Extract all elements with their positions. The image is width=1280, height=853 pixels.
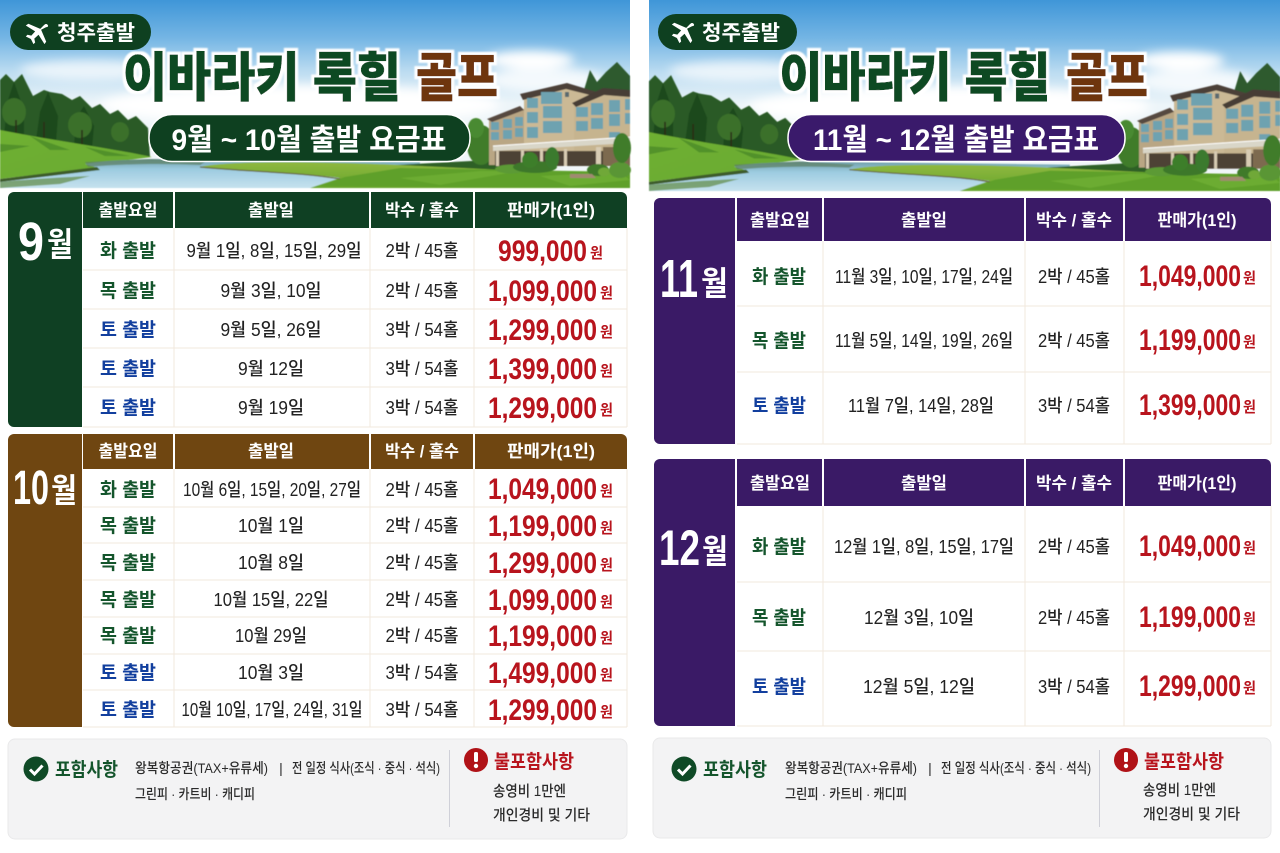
header row: 출발요일 (98, 201, 158, 220)
title left: 이바라키 록힐 (123, 49, 401, 108)
rows: 목 출발 (100, 625, 156, 647)
rows: 화 출발 (752, 536, 806, 558)
panel: inclusions right: 개인경비 및 기타 (1143, 806, 1240, 823)
rows: 12월 5일, 12일 (863, 677, 975, 697)
rows: 1,049,000 (1139, 530, 1241, 563)
rows: 1,049,000 (488, 473, 597, 506)
rows: 1,299,000 (488, 392, 597, 425)
rows: 화 출발 (100, 479, 156, 501)
header row: 판매가(1인) (1158, 211, 1236, 230)
rows: 1,199,000 (1139, 601, 1241, 634)
subtitle pill right: 11월 ~ 12월 출발 요금표 (813, 124, 1099, 157)
rows: 10월 10일, 17일, 24일, 31일 (182, 700, 362, 720)
header row: 판매가(1인) (507, 442, 595, 461)
panel: inclusions left: 전 일정 식사(조식 · 중식 · 석식) (292, 760, 440, 776)
rows: 9월 5일, 26일 (220, 320, 322, 340)
rows: 2박 / 45홀 (386, 516, 458, 536)
rows: 11월 3일, 10일, 17일, 24일 (835, 267, 1013, 287)
rows: 원 (600, 520, 613, 537)
title left: 골프 (416, 49, 498, 108)
panel: inclusions right: 전 일정 식사(조식 · 중식 · 석식) (941, 760, 1091, 776)
panel: inclusions left: 그린피 · 카트비 · 캐디피 (135, 786, 255, 802)
rows: 9월 3일, 10일 (220, 281, 322, 301)
rows: 원 (600, 594, 613, 611)
rows: 토 출발 (752, 395, 806, 417)
header row (83, 434, 627, 469)
panel: October table (8, 434, 627, 727)
panel: November table (654, 198, 1271, 444)
rows: 12월 1일, 8일, 15일, 17일 (834, 537, 1014, 557)
rows: 원 (600, 483, 613, 500)
panel: September table (8, 192, 627, 427)
rows: 토 출발 (100, 699, 156, 721)
rows: 원 (600, 667, 613, 684)
panel: inclusions left: 송영비 1만엔 (493, 783, 566, 800)
rows: 1,299,000 (488, 314, 597, 347)
panel: inclusions right: | (928, 760, 932, 776)
rows: 9월 1일, 8일, 15일, 29일 (186, 241, 362, 261)
rows: 목 출발 (100, 280, 156, 302)
rows: 2박 / 45홀 (1038, 608, 1110, 628)
banner: left scene (0, 0, 631, 188)
rows: 1,299,000 (488, 547, 597, 580)
rows: 3박 / 54홀 (386, 700, 458, 720)
header row: 박수 / 홀수 (385, 442, 459, 461)
month cell: 12월: 월 (702, 533, 728, 570)
rows: 2박 / 45홀 (386, 241, 458, 261)
rows: 11월 7일, 14일, 28일 (848, 396, 994, 416)
rows: 목 출발 (752, 607, 806, 629)
rows: 10월 3일 (238, 663, 304, 683)
rows: 원 (600, 557, 613, 574)
rows: 토 출발 (100, 319, 156, 341)
rows: 999,000 (498, 235, 587, 268)
rows: 원 (1243, 399, 1256, 416)
rows: 화 출발 (100, 240, 156, 262)
header row (83, 192, 627, 228)
rows: 원 (600, 324, 613, 341)
rows: 11월 5일, 14일, 19일, 26일 (835, 331, 1013, 351)
panel: inclusions left: 개인경비 및 기타 (493, 807, 590, 824)
rows: 3박 / 54홀 (386, 320, 458, 340)
header row: 판매가(1인) (1158, 474, 1236, 493)
rows: 원 (600, 402, 613, 419)
rows: 2박 / 45홀 (1038, 331, 1110, 351)
rows: 원 (1243, 680, 1256, 697)
month cell: 11월: 월 (701, 265, 728, 302)
rows: 목 출발 (100, 589, 156, 611)
icon: exclamation (464, 748, 488, 772)
panel: inclusions right: 포함사항 (703, 759, 767, 781)
rows: 1,199,000 (488, 510, 597, 543)
rows: 1,199,000 (488, 620, 597, 653)
rows: 3박 / 54홀 (1038, 677, 1110, 697)
badge: departure city right (658, 14, 797, 50)
banner: right scene (649, 0, 1280, 191)
rows: 10월 29일 (235, 626, 307, 646)
rows (737, 506, 1271, 726)
rows: 1,299,000 (488, 694, 597, 727)
header row: 출발요일 (98, 442, 158, 461)
rows: 1,049,000 (1139, 260, 1241, 293)
subtitle pill left: 9월 ~ 10월 출발 요금표 (172, 124, 446, 157)
month cell: 9월: 9 (18, 212, 44, 272)
rows: 2박 / 45홀 (1038, 267, 1110, 287)
rows: 목 출발 (100, 552, 156, 574)
rows: 목 출발 (100, 515, 156, 537)
rows: 목 출발 (752, 330, 806, 352)
rows: 3박 / 54홀 (1038, 396, 1110, 416)
icon: check (672, 756, 696, 782)
header row (737, 459, 1271, 506)
panel: inclusions right (653, 738, 1271, 838)
panel: inclusions left: | (279, 760, 283, 776)
header row (737, 198, 1271, 241)
rows: 1,099,000 (488, 584, 597, 617)
rows: 2박 / 45홀 (1038, 537, 1110, 557)
month cell: 10월 (8, 434, 82, 727)
rows: 10월 1일 (238, 516, 304, 536)
rows (83, 228, 627, 427)
rows: 1,299,000 (1139, 670, 1241, 703)
month cell: 11월: 11 (660, 249, 698, 309)
rows: 9월 19일 (238, 398, 304, 418)
icon: plane (672, 23, 694, 43)
rows: 토 출발 (100, 662, 156, 684)
rows: 1,399,000 (488, 353, 597, 386)
header row: 박수 / 홀수 (1036, 211, 1112, 230)
badge: departure city left: 청주출발 (57, 22, 135, 45)
month cell: 10월: 월 (51, 472, 77, 509)
panel: inclusions right: 불포함사항 (1144, 751, 1224, 773)
header row: 박수 / 홀수 (1036, 474, 1112, 493)
title right: 이바라키 록힐 (780, 49, 1050, 108)
subtitle pill right (788, 114, 1125, 162)
rows: 10월 8일 (238, 553, 304, 573)
rows: 3박 / 54홀 (386, 398, 458, 418)
rows: 2박 / 45홀 (386, 480, 458, 500)
rows: 2박 / 45홀 (386, 626, 458, 646)
panel: inclusions left: 왕복항공권(TAX+유류세) (135, 760, 268, 776)
rows: 원 (590, 245, 603, 262)
icon: exclamation (1114, 748, 1138, 772)
month cell: 10월: 10 (13, 462, 49, 515)
header row: 박수 / 홀수 (385, 201, 459, 220)
header row: 출발요일 (750, 211, 810, 230)
header row: 출발일 (248, 201, 294, 220)
header row: 출발일 (901, 211, 947, 230)
rows: 토 출발 (100, 358, 156, 380)
rows: 1,099,000 (488, 275, 597, 308)
rows: 12월 3일, 10일 (864, 608, 974, 628)
rows: 원 (1243, 540, 1256, 557)
icon: check (24, 756, 48, 782)
rows: 원 (600, 630, 613, 647)
panel: inclusions left: 포함사항 (55, 759, 118, 781)
rows: 토 출발 (752, 676, 806, 698)
panel: inclusions right: 송영비 1만엔 (1143, 782, 1216, 799)
header row: 출발일 (901, 474, 947, 493)
rows: 3박 / 54홀 (386, 663, 458, 683)
rows: 10월 6일, 15일, 20일, 27일 (183, 480, 361, 500)
rows: 원 (1243, 334, 1256, 351)
subtitle pill left (149, 114, 470, 162)
header row: 판매가(1인) (507, 201, 595, 220)
icon: plane (26, 24, 48, 44)
title right: 골프 (1066, 49, 1148, 108)
rows: 2박 / 45홀 (386, 281, 458, 301)
rows: 2박 / 45홀 (386, 590, 458, 610)
panel: December table (654, 459, 1271, 726)
badge: departure city right: 청주출발 (702, 22, 780, 45)
panel: inclusions left (8, 739, 627, 839)
rows: 원 (1243, 611, 1256, 628)
month cell: 11월 (654, 198, 735, 444)
panel: inclusions right: 그린피 · 카트비 · 캐디피 (785, 786, 907, 802)
rows: 3박 / 54홀 (386, 359, 458, 379)
rows: 1,199,000 (1139, 324, 1241, 357)
rows (737, 241, 1271, 444)
panel: inclusions left: 불포함사항 (494, 751, 574, 773)
rows: 원 (600, 285, 613, 302)
month cell: 12월 (654, 459, 735, 726)
rows: 1,499,000 (488, 657, 597, 690)
rows: 원 (600, 363, 613, 380)
rows: 화 출발 (752, 266, 806, 288)
rows: 2박 / 45홀 (386, 553, 458, 573)
header row: 출발요일 (750, 474, 810, 493)
rows (83, 469, 627, 727)
badge: departure city left (10, 14, 151, 50)
rows: 원 (1243, 270, 1256, 287)
rows: 1,399,000 (1139, 389, 1241, 422)
rows: 토 출발 (100, 397, 156, 419)
month cell: 9월 (8, 192, 82, 427)
month cell: 12월: 12 (659, 520, 700, 576)
rows: 10월 15일, 22일 (214, 590, 328, 610)
month cell: 9월: 월 (47, 226, 73, 263)
rows: 9월 12일 (238, 359, 304, 379)
panel: inclusions right: 왕복항공권(TAX+유류세) (785, 760, 917, 776)
rows: 원 (600, 704, 613, 721)
header row: 출발일 (248, 442, 294, 461)
